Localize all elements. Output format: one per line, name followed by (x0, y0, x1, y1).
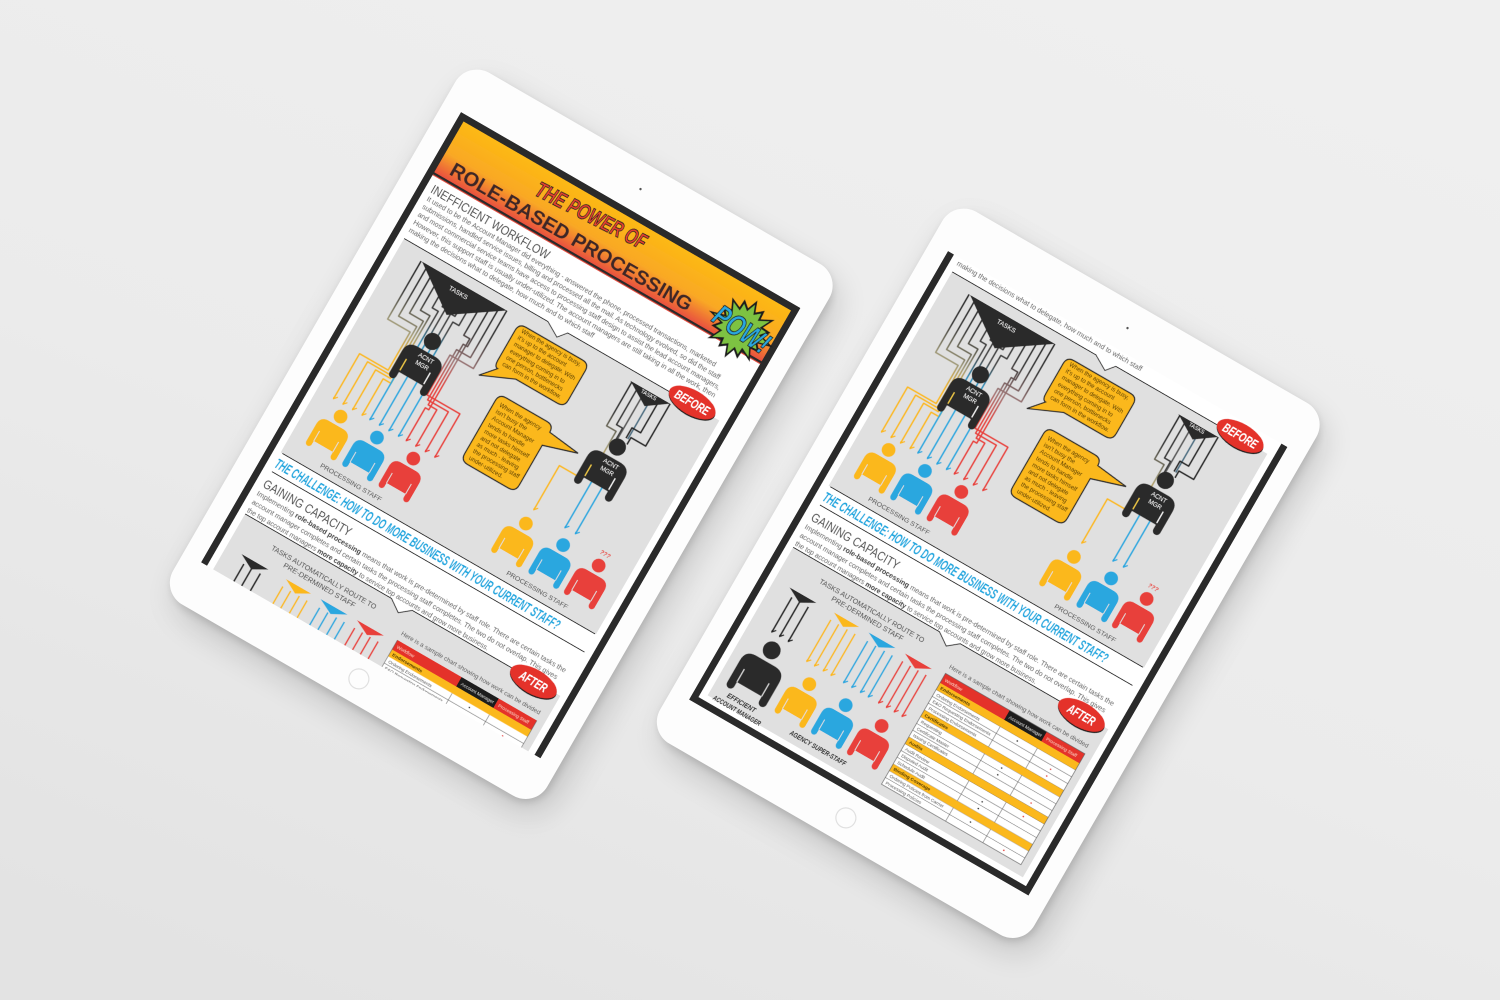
small tasks funnel: TASKS (1187, 422, 1206, 436)
account manager figure 2: MGR (599, 465, 615, 478)
capacity paragraph: Implementing role-based processing means that work is pre-determined by staff role. There are certain tasks the (255, 491, 567, 675)
speech bubble: not busy: as much - leaving (475, 442, 520, 471)
agency super-staff figures (767, 670, 900, 783)
account manager figure: ACNT (417, 352, 435, 366)
tasks funnel (953, 295, 1055, 373)
tablet 2 body (648, 199, 1329, 947)
speech bubble: not busy: Account Manager (490, 415, 535, 445)
challenge band: THE CHALLENGE: HOW TO DO MORE BUSINESS WITH YOUR CURRENT STAFF? (271, 456, 563, 634)
account manager figure 2 (574, 438, 627, 502)
wiring: slow manager (534, 371, 670, 542)
small tasks funnel: TASKS (639, 389, 658, 403)
workflow table: Issuing Certificates (912, 733, 949, 757)
speech bubble: busy: can form in the workflow. (1049, 394, 1111, 434)
speech bubble: not busy: tends to handle (1034, 455, 1075, 482)
workflow table top: E&O Requesting Endorsements (383, 666, 444, 704)
tablet 1 camera (639, 187, 642, 191)
workflow table: E&O Requesting Endorsements (931, 699, 992, 737)
workflow table: Workflow (943, 678, 964, 693)
speech bubble: busy: When the agency is busy, (520, 328, 582, 368)
small tasks funnel (1171, 414, 1218, 450)
speech bubble: busy: When the agency is busy, (1068, 361, 1130, 402)
after panel rule with tail (789, 547, 1062, 711)
capacity paragraph: account manager completes and certain tasks the processing staff completes. The two do not overlap. This gives (250, 499, 559, 682)
challenge band: THE CHALLENGE: HOW TO DO MORE BUSINESS WITH YOUR CURRENT STAFF? (819, 489, 1111, 667)
routing heading: TASKS AUTOMATICALLY ROUTE TO (270, 543, 378, 611)
small tasks funnel (630, 380, 670, 406)
speech bubble: not busy: isn't busy the (494, 409, 529, 433)
processing staff figures 2: ??? (598, 550, 611, 561)
speech bubble: not busy: as much - leaving (1023, 475, 1068, 505)
account manager figure: MGR (414, 359, 430, 373)
speech bubble: busy: one person, bottlenecks (505, 354, 564, 393)
workflow table: Disputed Audit (900, 753, 930, 773)
pow burst: POW! (706, 299, 776, 361)
tablet 2 contact shadow (649, 204, 1330, 951)
speech bubble: busy: everything coming in to (508, 348, 567, 386)
panel: before (281, 239, 719, 634)
speech bubble: busy (478, 325, 588, 406)
account manager figure (936, 356, 1004, 431)
processing staff figures 2: ??? (1146, 583, 1159, 594)
speech bubble: not busy (462, 396, 579, 490)
intro paragraph: and most commercial service teams have access to processing staff design to assist the lead account managers, (416, 212, 721, 392)
page white (207, 175, 760, 754)
workflow table top (377, 640, 537, 756)
challenge band (271, 453, 595, 652)
title: the power of: THE POWER OF (531, 177, 652, 255)
processing staff figures: PROCESSING STAFF (867, 496, 931, 537)
workflow table top: Endorsements (391, 652, 423, 675)
title: role-based processing: ROLE-BASED PROCESSING (446, 158, 696, 316)
routing heading: PRE-DERMINED STAFF (830, 594, 906, 643)
routing arrows (233, 554, 384, 660)
workflow table: Processing Staff (1045, 736, 1078, 759)
workflow table: Audits (908, 740, 924, 753)
capacity paragraph: the top account managers more capacity to service top accounts and grow more business. (793, 541, 1038, 686)
speech bubble: not busy: more tasks himself (483, 428, 530, 460)
panel: before (829, 272, 1267, 668)
after badge: AFTER (1064, 701, 1099, 729)
workflow table: Audit Review (904, 747, 931, 765)
workflow table: Account Manager (1007, 715, 1043, 739)
header band (426, 112, 800, 368)
page white (689, 251, 1287, 896)
challenge band (819, 486, 1143, 685)
workflow table: Ordering Endorsements (935, 692, 982, 722)
efficient account manager figure: EFFICIENT (725, 691, 759, 715)
speech bubble: not busy (1009, 427, 1132, 543)
speech bubble: not busy: tends to handle (486, 422, 527, 449)
capacity paragraph: the top account managers more capacity to service top accounts and grow more business. (245, 507, 490, 653)
workflow table: Requesting (920, 720, 943, 736)
workflow table top: Workflow (395, 645, 416, 660)
intro paragraph last line: making the decisions what to delegate, how much and to which staff (955, 261, 1143, 373)
account manager figure 2: MGR (1147, 498, 1163, 512)
tablet 2 camera (1126, 326, 1129, 330)
efficient account manager figure: ACCOUNT MANAGER (711, 693, 763, 728)
before badge (1211, 412, 1269, 461)
before badge: BEFORE (672, 387, 713, 419)
workflow table top: Processing Staff (497, 703, 530, 726)
workflow table: Processing Policies (885, 780, 923, 805)
account manager figure 2 (1121, 462, 1189, 537)
intro paragraph: submissions, handled service issues, billing and processed all the mail. As technology evolved, so did the staff (421, 204, 721, 381)
speech bubble: not busy: When the agency (498, 402, 543, 432)
workflow table: Endorsements (939, 686, 971, 708)
routing heading: PRE-DERMINED STAFF (282, 561, 358, 610)
speech bubble: busy: it's up to the account (516, 335, 568, 369)
heading: gaining capacity: GAINING CAPACITY (260, 476, 355, 539)
speech bubble: busy (1027, 352, 1137, 454)
routing heading: TASKS AUTOMATICALLY ROUTE TO (818, 577, 926, 645)
chart caption: Here is a sample chart showing how work can be divided (947, 664, 1090, 750)
efficient account manager figure (711, 629, 800, 728)
page frame (689, 251, 1287, 896)
tablet 1 body (161, 60, 842, 808)
workflow table top: Ordering Endorsements (387, 659, 434, 689)
page frame (201, 112, 800, 758)
tablet 1 (166, 70, 846, 821)
after panel rule with tail (241, 514, 514, 677)
chart caption: Here is a sample chart showing how work can be divided (399, 630, 542, 717)
intro paragraph: It used to be the Account Manager did everything - answered the phone, processed transactions, marketed (425, 196, 717, 369)
workflow table: Certificates (923, 713, 950, 731)
intro paragraph: However, this support staff is usually under-utilized. The account managers are still taking in all the work, then (412, 219, 717, 400)
speech bubble: busy: manager to delegate. With (512, 341, 576, 382)
speech bubble: busy: it's up to the account (1064, 368, 1116, 402)
wiring: busy manager (882, 291, 1064, 491)
workflow table (881, 673, 1085, 865)
workflow table: Processing Endorsements (928, 706, 978, 738)
processing staff figures 2 (1031, 535, 1169, 656)
account manager figure 2: ACNT (1150, 491, 1168, 505)
speech bubble: not busy: the processing staff (1019, 481, 1069, 514)
speech bubble: not busy: When the agency (1046, 435, 1091, 466)
processing staff figures: PROCESSING STAFF (319, 463, 383, 504)
panel rule with tail (948, 272, 1221, 435)
wiring: slow manager (1082, 405, 1218, 576)
before badge: BEFORE (1220, 420, 1261, 452)
tablet 2 screen (689, 251, 1287, 896)
speech bubble: busy: manager to delegate. With (1060, 375, 1124, 416)
account manager figure: MGR (962, 393, 978, 406)
account manager figure (388, 332, 442, 396)
before badge (668, 385, 716, 421)
tablet 1 contact shadow (162, 65, 843, 812)
workflow table: Schedule Audit (896, 760, 927, 780)
workflow table top: Account Manager (459, 682, 495, 706)
speech bubble: not busy: Account Manager (1038, 449, 1083, 479)
routing arrows (762, 587, 932, 717)
tablet 2 home button (832, 804, 860, 832)
heading: inefficient workflow: INEFFICIENT WORKFLOW (428, 182, 553, 263)
header rule (427, 169, 768, 367)
tablet 2 (643, 199, 1339, 962)
tablet 1 home button (345, 665, 373, 693)
workflow table: Ordering Policies from Carrier (889, 774, 945, 809)
wiring: busy manager (334, 258, 516, 457)
speech bubble: not busy: under-utilized. (467, 455, 504, 480)
tablet 2 cast shadow (653, 214, 1334, 962)
workflow table: Binding Coverage (892, 767, 931, 793)
panel rule with tail (400, 239, 673, 402)
processing staff figures 2: PROCESSING STAFF (505, 570, 569, 611)
capacity paragraph: Implementing role-based processing means that work is pre-determined by staff role. There are certain tasks the (803, 524, 1115, 708)
agency super-staff figures: AGENCY SUPER-STAFF (787, 728, 848, 768)
speech bubble: not busy: and not delegate (1027, 468, 1070, 497)
speech bubble: not busy: and not delegate (479, 435, 522, 464)
after badge: AFTER (516, 667, 551, 696)
speech bubble: busy: everything coming in to (1056, 381, 1115, 419)
account manager figure 2: ACNT (602, 457, 620, 472)
account manager figure: ACNT (965, 385, 983, 400)
tasks funnel: TASKS (995, 318, 1017, 335)
panel: after (213, 514, 560, 752)
speech bubble: not busy: isn't busy the (1042, 442, 1077, 466)
after badge (510, 664, 558, 700)
speech bubble: not busy: more tasks himself (1031, 462, 1078, 493)
speech bubble: busy: can form in the workflow. (501, 361, 563, 401)
intro paragraph: making the decisions what to delegate, how much and to which staff (407, 227, 595, 340)
processing staff figures 2: PROCESSING STAFF (1053, 603, 1117, 644)
after badge (1052, 691, 1111, 740)
speech bubble: busy: one person, bottlenecks (1053, 388, 1112, 426)
capacity paragraph: account manager completes and certain tasks the processing staff completes. The two do not overlap. This gives (798, 533, 1107, 715)
tasks funnel: TASKS (447, 285, 469, 302)
tablet 1 cast shadow (166, 75, 847, 823)
processing staff figures 2 (491, 516, 611, 610)
tablet 1 screen (201, 112, 800, 758)
processing staff figures (306, 410, 421, 502)
processing staff figures (845, 435, 980, 549)
speech bubble: not busy: under-utilized. (1015, 488, 1052, 513)
heading: gaining capacity: GAINING CAPACITY (808, 510, 903, 573)
workflow table: Certificate Master (916, 726, 951, 749)
speech bubble: not busy: the processing staff (471, 448, 521, 481)
pow burst (707, 297, 775, 362)
tasks funnel (422, 262, 506, 316)
panel: after (708, 547, 1108, 877)
